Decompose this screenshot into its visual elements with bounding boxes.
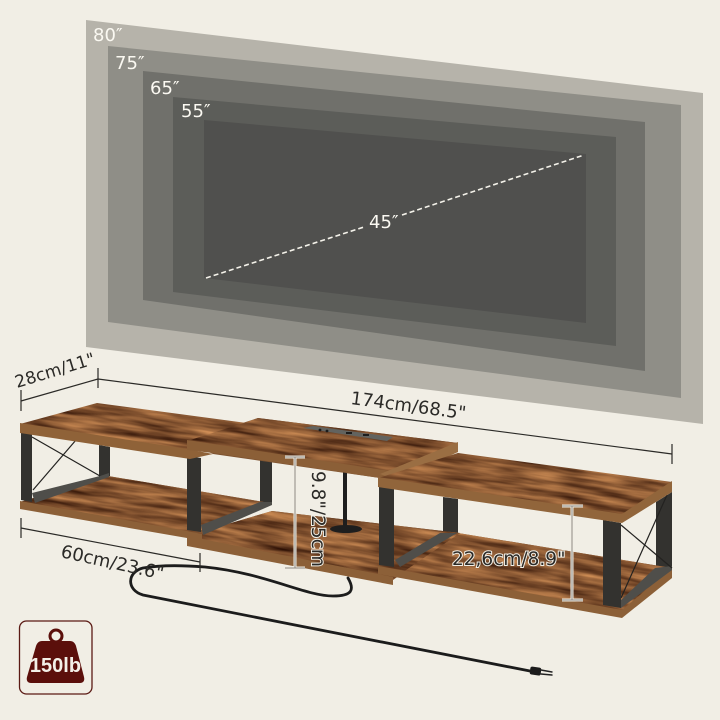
80 inch screen [86,20,703,424]
top shelf centre front edge [187,440,397,480]
lower shelf: centre [200,511,460,578]
top shelf: right [380,453,671,514]
45 inch label: 45″ [369,212,399,233]
top shelf left front edge [20,423,213,459]
power strip [303,426,393,441]
65 inch label: 65″ [150,78,180,99]
badge: 150lb weight capacity [20,621,92,694]
lower shelf: right [406,533,666,610]
plug [529,666,552,676]
75 inch label: 75″ [115,53,145,74]
top shelf centre side edge [380,442,458,480]
front legs [21,433,621,608]
55 inch label: 55″ [181,101,211,122]
badge: 150lb weight capacity: 150lb [30,655,81,677]
dimension: width 174cm: 174cm/68.5" [349,388,467,424]
45 inch dashed diagonal [206,155,584,278]
dimension: height 22.6cm: 22,6cm/8.9" [452,549,566,570]
floating shelf unit [20,403,672,618]
power cord [131,566,552,676]
dimension: depth 28cm: 28cm/11" [13,349,98,393]
lower shelf: left [22,476,264,532]
TV size comparison [86,20,703,424]
65 inch screen [143,71,645,371]
dimension: height 25cm: 9.8"/25cm [307,471,328,567]
rear legs [99,445,672,570]
dimension: bottom 60cm [21,518,200,585]
55 inch screen [173,97,616,346]
cable pole [330,470,362,533]
cord path [131,566,530,671]
cross wires [32,437,672,598]
shelf base fill [20,418,672,613]
dimension: height 25cm [285,457,328,568]
top shelf: centre [190,418,456,470]
icon: weight [27,630,84,683]
dimension: width 174cm [98,379,672,464]
side brackets [32,473,672,608]
top shelf right front edges [378,477,672,523]
dimension: bottom 60cm: 60cm/23.6" [59,541,166,585]
lower shelf front edges [20,501,672,618]
dimension: height 22.6cm [452,506,583,600]
45 inch screen [204,120,586,323]
top shelf: left [22,403,244,449]
75 inch screen [108,46,681,398]
80 inch label: 80″ [93,25,123,46]
